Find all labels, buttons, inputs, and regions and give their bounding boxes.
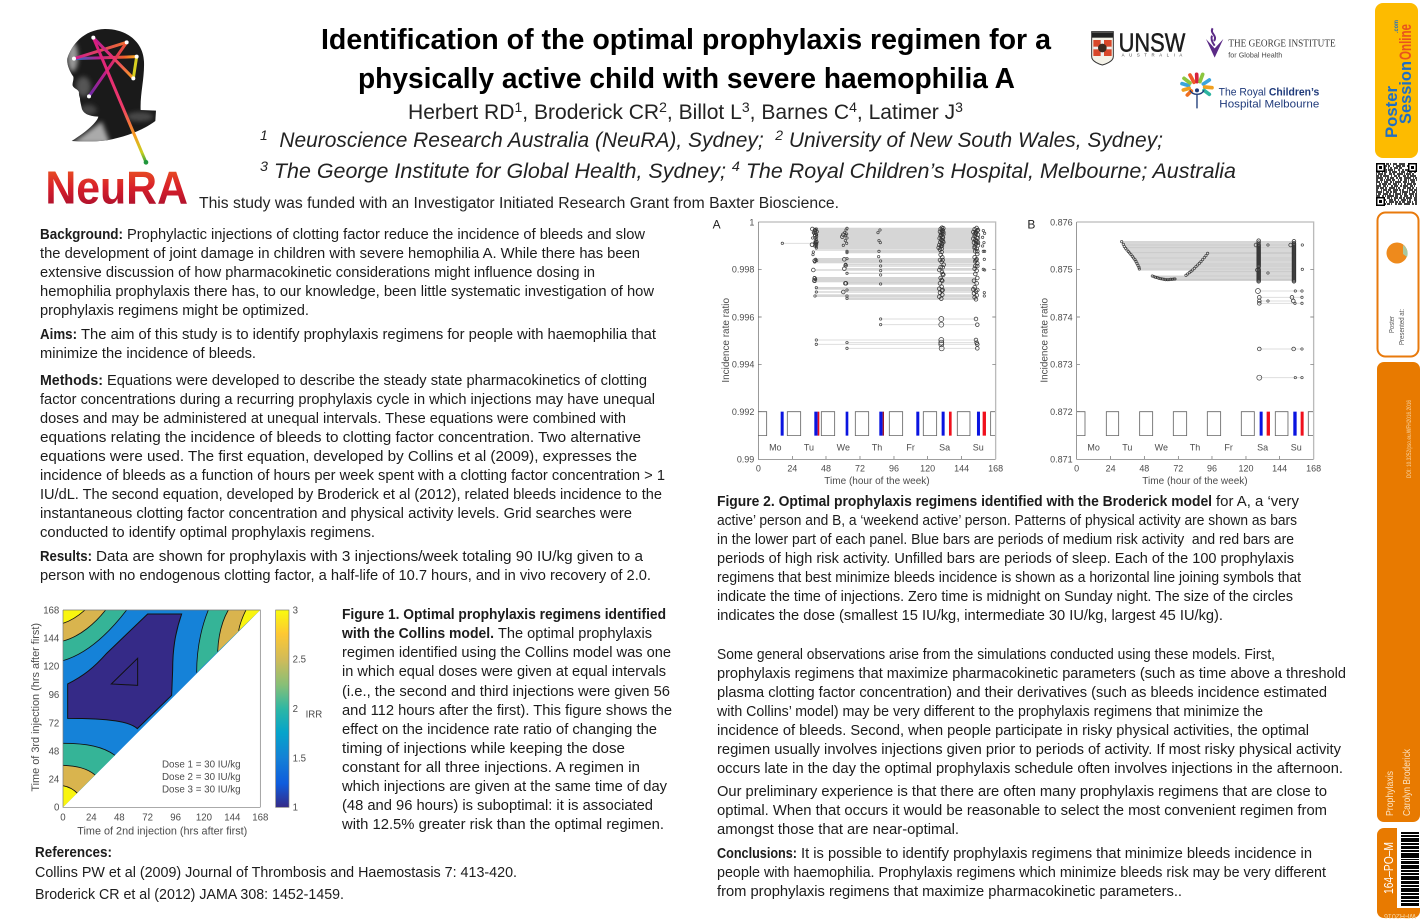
plot frame: [1077, 222, 1314, 459]
y axis ticks: 48: [49, 746, 59, 757]
day labels: Sa: [1257, 442, 1268, 452]
y axis ticks: 144: [43, 634, 60, 645]
text block: conclusions: It is possible to identify prophylaxis regimens that minimize bleeds incidence in: [801, 846, 1312, 862]
y axis ticks: 96: [49, 690, 59, 701]
y axis ticks: 0.871: [1050, 455, 1073, 465]
affiliations: Neuroscience Research Australia (NeuRA), Sydney;: [268, 129, 775, 152]
text block: aims: minimize the incidence of bleeds.: [40, 346, 256, 362]
plot axes: [63, 610, 260, 807]
plot frame: [758, 222, 996, 459]
figure 1 caption: (i.e., the second and third injections were given 56: [342, 684, 670, 700]
panel letter: B: [1027, 218, 1035, 232]
x axis ticks: 168: [1306, 464, 1321, 474]
x axis ticks: [1074, 464, 1321, 474]
icon: head silhouette: [67, 29, 156, 142]
day labels: Th: [1190, 442, 1200, 452]
figure 1 caption: [341, 607, 672, 833]
figure 2 caption: indicate the time of injections. Zero time is midnight on Sunday night. The size of the circles: [717, 589, 1293, 605]
text block: preliminary experience: Our preliminary experience is that there are often many prophylaxis regimens that are close to: [717, 784, 1327, 800]
figure 1 caption: effect on the incidence rate ratio of changing the: [342, 722, 657, 738]
logo: UNSW: AUSTRALIA: [1122, 53, 1182, 58]
x axis ticks: 0: [1074, 464, 1079, 474]
day labels: Su: [1291, 442, 1302, 452]
figure 2 caption: periods of high risk activity. Unfilled bars are periods of sleep. Each of the 100 prophylaxis: [717, 551, 1294, 567]
title: Identification of the optimal prophylaxis regimen for a: [321, 24, 1052, 56]
day labels: [1087, 442, 1302, 452]
icon: coloured star lines: [72, 36, 148, 165]
logo: Royal Children's Hospital Melbourne: [1182, 74, 1319, 111]
figure 2 caption: Figure 2. Optimal prophylaxis regimens identified with the Broderick model: [717, 494, 1212, 510]
affiliations: 1: [260, 127, 268, 143]
y axis ticks: 0.873: [1050, 360, 1073, 370]
y axis label: Time of 3rd injection (hrs after first): [30, 623, 42, 792]
x axis ticks: 0: [756, 464, 761, 474]
y axis ticks: [1050, 217, 1073, 465]
figure 2 panel B: [1027, 217, 1321, 487]
y axis ticks: 0.998: [732, 265, 754, 275]
regimen lines: [1122, 242, 1302, 378]
day labels: [769, 442, 984, 452]
colour bar: IRR: [306, 710, 322, 721]
orange panel: DOI: 10.3252/pso.eu.WFH2016.2016: [1407, 399, 1413, 478]
references: References:: [35, 845, 112, 861]
day labels: Sa: [939, 442, 950, 452]
text block: conclusions: [717, 846, 1326, 900]
poster session online badge: .com: [1394, 20, 1400, 33]
text block: background: hemophilia prophylaxis there has, to our knowledge, been little systematic investigation of how: [40, 284, 655, 300]
text block: aims: Aims:: [40, 327, 77, 343]
logo: Royal Children's Hospital Melbourne: The Royal Children’s: [1219, 87, 1319, 99]
dose legend: Dose 1 = 30 IU/kg: [162, 760, 241, 771]
text block: general observations: [716, 647, 1346, 777]
figure 2 caption: regimens that best minimize bleeds incidence is shown as a horizontal line joining symbols that: [717, 570, 1301, 586]
x axis ticks: 72: [855, 464, 865, 474]
logo: The George Institute: [1206, 28, 1336, 60]
affiliations: 2: [774, 127, 783, 143]
affiliations: The Royal Children’s Hospital, Melbourne; Australia: [740, 160, 1236, 183]
affiliations: 4: [732, 158, 740, 174]
regimen symbols: [1122, 241, 1302, 378]
text block: methods: factor concentrations during a recurring prophylaxis cycle in which injections may have unequal: [40, 392, 655, 408]
x axis ticks: 144: [1272, 464, 1287, 474]
day labels: Fr: [1224, 442, 1233, 452]
poster session online badge: Session: [1396, 61, 1415, 124]
x axis label: Time of 2nd injection (hrs after first): [77, 825, 247, 837]
text block: background: extensive discussion of how pharmacokinetic considerations might influence dosing in: [40, 265, 595, 281]
colour bar: 1.5: [293, 753, 306, 764]
figure 1 caption: with 12.5% greater risk than the optimal regimen.: [341, 817, 664, 833]
poster session online badge: [1375, 3, 1418, 158]
NeuRA wordmark: NeuRA: [45, 161, 188, 213]
figure 1 caption: regimen identified using the Collins model was one: [342, 645, 671, 661]
x axis ticks: 96: [889, 464, 899, 474]
text block: background: [40, 227, 655, 319]
text block: general observations: incidence of bleeds. Second, when people participate in risky physical activities, the optimal: [717, 723, 1309, 739]
partner logos: [1092, 28, 1336, 111]
text block: general observations: plasma clotting factor concentration) and their derivatives (such as bleeds incidence estimated: [717, 685, 1327, 701]
text block: general observations: prophylaxis regimens that maximize pharmacokinetic parameters (such as time above a threshold: [717, 666, 1346, 682]
logo: The George Institute: for Global Health: [1228, 53, 1282, 60]
x axis ticks: 168: [988, 464, 1003, 474]
regimen symbols: [782, 228, 985, 348]
text block: results: person with no endogenous clotting factor, a half-life of 10.7 hours, and in vivo recovery of 2.0.: [40, 568, 651, 584]
text block: methods: incidence of bleeds as a function of hours per week spent with a clotting factor concentration > 1: [40, 468, 665, 484]
y axis ticks: [732, 217, 754, 465]
text block: results: [40, 549, 651, 584]
affiliations: [260, 127, 1236, 183]
right column body text: [716, 494, 1346, 900]
logo: UNSW: UNSW: [1119, 28, 1186, 58]
figure 1: contour chart: [30, 605, 322, 837]
x axis ticks: 120: [196, 812, 212, 823]
text block: methods: IU/dL. The second equation, developed by Broderick et al (2012), related bleeds incidence to the: [40, 487, 662, 503]
authors: , Billot L: [667, 101, 742, 124]
authors: 1: [514, 99, 522, 115]
figure 1 caption: which injections are given at the same time of day: [341, 779, 668, 795]
text block: background: prophylaxis regimens might be optimized.: [40, 303, 309, 319]
text block: methods: equations were used. The first equation, developed by Collins et al (2009), expresses the: [40, 449, 637, 465]
text block: background: Background:: [40, 227, 123, 243]
activity bars: [758, 412, 996, 436]
text block: preliminary experience: optimal. When that occurs it would be reasonable to select the most convenient regimen from: [717, 803, 1327, 819]
sidebar: [1375, 3, 1420, 919]
day labels: Tu: [1122, 442, 1132, 452]
presented at box: [1378, 212, 1418, 356]
text block: methods: [40, 373, 665, 541]
y axis label: Incidence rate ratio: [1039, 298, 1050, 383]
y axis ticks: 0.994: [732, 360, 754, 370]
figure 1 caption: timing of injections while keeping the dose: [342, 741, 625, 757]
x axis ticks: 72: [1173, 464, 1183, 474]
text block: general observations: with Collins’ model) may be very different to the prophylaxis regimens that minimize the: [716, 704, 1263, 720]
figure 1 caption: with the Collins model.: [341, 626, 494, 642]
y axis ticks: 168: [43, 605, 59, 616]
day labels: Tu: [804, 442, 814, 452]
colour bar: 1: [293, 803, 298, 814]
x axis ticks: 96: [1207, 464, 1217, 474]
orange panel: Prophylaxis: [1384, 771, 1396, 816]
logo: Royal Children's Hospital Melbourne: Hospital Melbourne: [1219, 99, 1319, 111]
regimen lines: [782, 228, 978, 348]
y axis ticks: 0.996: [732, 312, 754, 322]
affiliations: University of New South Wales, Sydney;: [783, 129, 1163, 152]
text block: conclusions: people with haemophilia. Prophylaxis regimens which minimize bleeds risk may be very different: [717, 865, 1326, 881]
left column body text: [35, 227, 672, 903]
figure 1 caption: The optimal prophylaxis: [498, 626, 652, 642]
x axis label: Time (hour of the week): [1142, 476, 1248, 487]
x axis ticks: 168: [252, 812, 268, 823]
barcode panel: [1377, 828, 1420, 919]
day labels: We: [1155, 442, 1168, 452]
icon: congress emblem: [1386, 242, 1408, 264]
x axis ticks: 0: [60, 812, 66, 823]
x axis ticks: 144: [224, 812, 241, 823]
text block: general observations: regimen usually involves injections given prior to periods of activity. If most risky physical activity: [717, 742, 1342, 758]
figure 1 caption: constant for all three injections. A regimen in: [342, 760, 640, 776]
text block: general observations: occurs late in the day the optimal prophylaxis schedule often involves injections in the afternoon.: [717, 761, 1343, 777]
text block: conclusions: from prophylaxis regimens that maximize pharmacokinetic parameters..: [717, 884, 1182, 900]
x axis ticks: 24: [1106, 464, 1116, 474]
affiliations: 3: [260, 158, 268, 174]
references: Broderick CR et al (2012) JAMA 308: 1452-1459.: [35, 887, 344, 903]
text block: background: Prophylactic injections of clotting factor reduce the incidence of bleeds and slow: [127, 227, 646, 243]
y axis ticks: 0.876: [1050, 217, 1073, 227]
figure 1 caption: (48 and 96 hours) is suboptimal: it is associated: [342, 798, 653, 814]
figure 2 panel A: [713, 217, 1003, 487]
y axis ticks: 0.99: [737, 455, 754, 465]
x axis ticks: 48: [114, 812, 125, 823]
day labels: Th: [872, 442, 882, 452]
x axis ticks: 72: [142, 812, 153, 823]
day labels: Mo: [769, 442, 782, 452]
y axis ticks: 0.992: [732, 407, 754, 417]
text block: methods: conducted to identify optimal prophylaxis regimens.: [40, 525, 375, 541]
presented at box: Poster: [1389, 315, 1396, 333]
references: Collins PW et al (2009) Journal of Thrombosis and Haemostasis 7: 413-420.: [35, 865, 517, 881]
colour bar: 3: [293, 605, 298, 616]
authors: 2: [659, 99, 667, 115]
references: [35, 845, 517, 903]
y axis ticks: 24: [49, 775, 60, 786]
day labels: Su: [973, 442, 984, 452]
text block: methods: Methods:: [40, 373, 103, 389]
x axis ticks: 48: [1139, 464, 1149, 474]
x axis ticks: 96: [170, 812, 181, 823]
text block: methods: doses and may be administered at unequal intervals. These equations were combined with: [40, 411, 626, 427]
text block: conclusions: Conclusions:: [717, 846, 797, 862]
dose legend: Dose 2 = 30 IU/kg: [162, 772, 241, 783]
dose legend: Dose 3 = 30 IU/kg: [162, 784, 241, 795]
text block: general observations: Some general observations arise from the simulations conducted using these models. First,: [717, 647, 1275, 663]
authors: 3: [742, 99, 750, 115]
figure 1 caption: Figure 1. Optimal prophylaxis regimens identified: [342, 607, 666, 623]
figure 2 caption: in the lower part of each panel. Blue bars are periods of medium risk activity and red bars are: [717, 532, 1294, 548]
text block: methods: Equations were developed to describe the steady state pharmacokinetics of clotting: [107, 373, 647, 389]
x axis ticks: 24: [787, 464, 797, 474]
y axis ticks: 72: [49, 718, 59, 729]
y axis label: Incidence rate ratio: [721, 298, 732, 383]
figure 1 caption: and 112 hours after the first). This figure shows the: [342, 703, 672, 719]
authors: 3: [955, 99, 963, 115]
poster session online badge: Poster: [1382, 86, 1401, 138]
text block: results: Data are shown for prophylaxis with 3 injections/week totaling 90 IU/kg given to a: [96, 549, 643, 565]
x axis label: Time (hour of the week): [824, 476, 930, 487]
y axis ticks: 120: [43, 662, 59, 673]
panel letter: A: [713, 218, 721, 232]
text block: methods: instantaneous clotting factor concentration and physical activity levels. Grid searches were: [40, 506, 632, 522]
barcode panel: WFH2016: [1384, 912, 1416, 919]
x axis ticks: 48: [821, 464, 831, 474]
text block: aims: The aim of this study is to identify prophylaxis regimens for people with haemophilia that: [81, 327, 656, 343]
figure 2 caption: for A, a ‘very: [1216, 494, 1300, 510]
barcode: [1401, 832, 1419, 906]
poster session online badge: Online: [1396, 24, 1415, 60]
figure 2 caption: indicates the dose (smallest 15 IU/kg, intermediate 30 IU/kg, largest 45 IU/kg).: [717, 608, 1223, 624]
day labels: Fr: [906, 442, 915, 452]
dose legend: [162, 760, 241, 795]
y axis ticks: 0.874: [1050, 312, 1073, 322]
logo: UNSW: [1092, 28, 1186, 65]
text block: background: the development of joint damage in children with severe hemophilia A. While there has been: [40, 246, 640, 262]
figure 2 caption: active’ person and B, a ‘weekend active’ person. Patterns of physical activity are shown as bars: [717, 513, 1297, 529]
QR code: [1376, 163, 1417, 206]
day labels: We: [837, 442, 850, 452]
text block: results: Results:: [40, 549, 92, 565]
presented at box: Presented at:: [1399, 309, 1406, 345]
y axis ticks: 0.875: [1050, 265, 1073, 275]
colour bar: 2.5: [293, 654, 306, 665]
title: [321, 24, 1052, 95]
y axis ticks: 0: [54, 803, 59, 814]
x axis ticks: [60, 812, 268, 823]
x axis ticks: 120: [1238, 464, 1253, 474]
authors: 4: [849, 99, 857, 115]
barcode panel: 164–PO–M: [1381, 842, 1396, 894]
authors: , Latimer J: [857, 101, 955, 124]
funding statement: This study was funded with an Investigator Initiated Research Grant from Baxter Bioscience.: [199, 195, 839, 212]
orange panel: [1377, 362, 1420, 822]
orange panel: Carolyn Broderick: [1401, 748, 1413, 816]
text block: preliminary experience: amongst those that are near-optimal.: [717, 822, 959, 838]
figure 1 caption: in which equal doses were given at equal intervals: [342, 664, 666, 680]
x axis ticks: 24: [86, 812, 97, 823]
activity bars: [1077, 412, 1314, 436]
figure 2 caption: [717, 494, 1301, 624]
title: physically active child with severe haemophilia A: [358, 63, 1015, 95]
text block: methods: equations relating the incidence of bleeds to clotting factor concentration. Two alternative: [40, 430, 641, 446]
authors: Herbert RD: [408, 101, 514, 124]
affiliations: The George Institute for Global Health, Sydney;: [268, 160, 732, 183]
authors: , Broderick CR: [522, 101, 659, 124]
text block: preliminary experience: [717, 784, 1327, 838]
x axis ticks: 120: [920, 464, 935, 474]
logo: The George Institute: THE GEORGE INSTITUTE: [1228, 39, 1336, 50]
colour bar: 2: [293, 704, 298, 715]
y axis ticks: 1: [749, 217, 754, 227]
y axis ticks: 0.872: [1050, 407, 1073, 417]
NeuRA logo: [45, 25, 188, 213]
contour regions: [63, 610, 260, 807]
x axis ticks: 144: [954, 464, 969, 474]
y axis ticks: [43, 605, 60, 814]
day labels: Mo: [1087, 442, 1100, 452]
colour bar: [276, 605, 322, 814]
text block: aims: [40, 327, 656, 362]
authors: , Barnes C: [750, 101, 849, 124]
x axis ticks: [756, 464, 1003, 474]
